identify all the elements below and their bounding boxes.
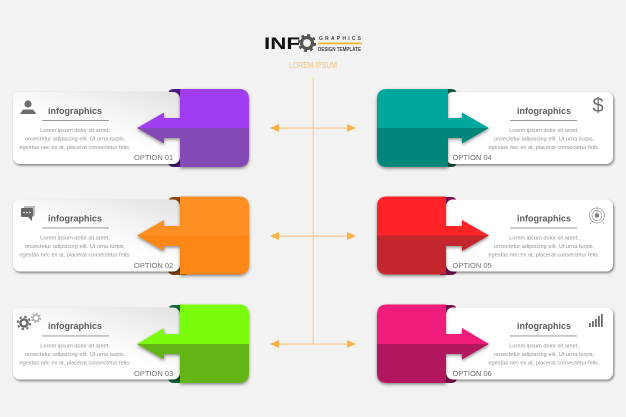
panel: option 02: infographics <box>48 214 102 224</box>
panel: option 04: OPTION 04 <box>452 153 492 162</box>
logo: INFOGRAPHICS design template: INF <box>264 34 300 53</box>
panel: option 06: egestas nec ex at, placerat consectetur felis. <box>488 360 600 366</box>
panel: option 05: egestas nec ex at, placerat consectetur felis. <box>488 252 600 258</box>
panel: option 04: Lorem ipsum dolor sit amet, <box>509 128 579 134</box>
panel: option 01: Lorem ipsum dolor sit amet, <box>40 128 110 134</box>
panel: option 02: OPTION 02 <box>134 261 173 270</box>
panel: option 02: Lorem ipsum dolor sit amet, <box>40 236 110 242</box>
panel: option 06: onsectetur adipiscing elit. Ut urna turpis, <box>494 352 595 358</box>
panel: option 05: infographics <box>517 214 571 224</box>
logo: INFOGRAPHICS design template: DESIGN TEMPLATE <box>318 47 362 53</box>
panel: option 04: infographics <box>517 106 571 116</box>
panel: option 01: egestas nec ex at, placerat consectetur felis. <box>19 145 131 151</box>
panel: option 01: infographics <box>48 106 102 116</box>
panel: option 05: onsectetur adipiscing elit. Ut urna turpis, <box>494 244 595 250</box>
icon: dollar sign: $ <box>592 95 604 117</box>
panel: option 06: Lorem ipsum dolor sit amet, <box>509 344 579 350</box>
panel: option 03: egestas nec ex at, placerat consectetur felis. <box>19 360 131 366</box>
panel: option 03 <box>13 304 249 383</box>
panel: option 01 <box>13 89 249 167</box>
panel: option 04 <box>377 89 613 167</box>
icon: person <box>20 100 36 114</box>
icon: bar chart <box>589 314 603 327</box>
logo: INFOGRAPHICS design template <box>264 34 362 53</box>
icon: target <box>590 207 604 224</box>
panel: option 01: onsectetur adipiscing elit. Ut urna turpis, <box>25 136 126 142</box>
panel: option 04: egestas nec ex at, placerat consectetur felis. <box>488 145 600 151</box>
panel: option 05: Lorem ipsum dolor sit amet, <box>509 236 579 242</box>
center connector with arrows <box>270 77 356 348</box>
panel: option 06: infographics <box>517 321 571 331</box>
panel: option 02 <box>13 196 249 275</box>
panel: option 05 <box>377 196 613 275</box>
panel: option 06: OPTION 06 <box>452 369 492 378</box>
icon: gears <box>18 314 40 329</box>
panel: option 04: onsectetur adipiscing elit. Ut urna turpis, <box>494 136 595 142</box>
logo: INFOGRAPHICS design template: GRAPHICS <box>319 36 362 42</box>
panel: option 03: OPTION 03 <box>134 369 173 378</box>
panel: option 03: onsectetur adipiscing elit. Ut urna turpis, <box>25 352 126 358</box>
panel: option 02: onsectetur adipiscing elit. Ut urna turpis, <box>25 244 126 250</box>
panel: option 05: OPTION 05 <box>452 261 492 270</box>
panel: option 02: egestas nec ex at, placerat consectetur felis. <box>19 252 131 258</box>
panel: option 01: OPTION 01 <box>134 153 173 162</box>
subtitle: LOREM IPSUM <box>289 60 337 70</box>
panel: option 06 <box>377 304 613 383</box>
panel: option 03: Lorem ipsum dolor sit amet, <box>40 344 110 350</box>
panel: option 03: infographics <box>48 321 102 331</box>
icon: speech bubble <box>21 206 35 221</box>
